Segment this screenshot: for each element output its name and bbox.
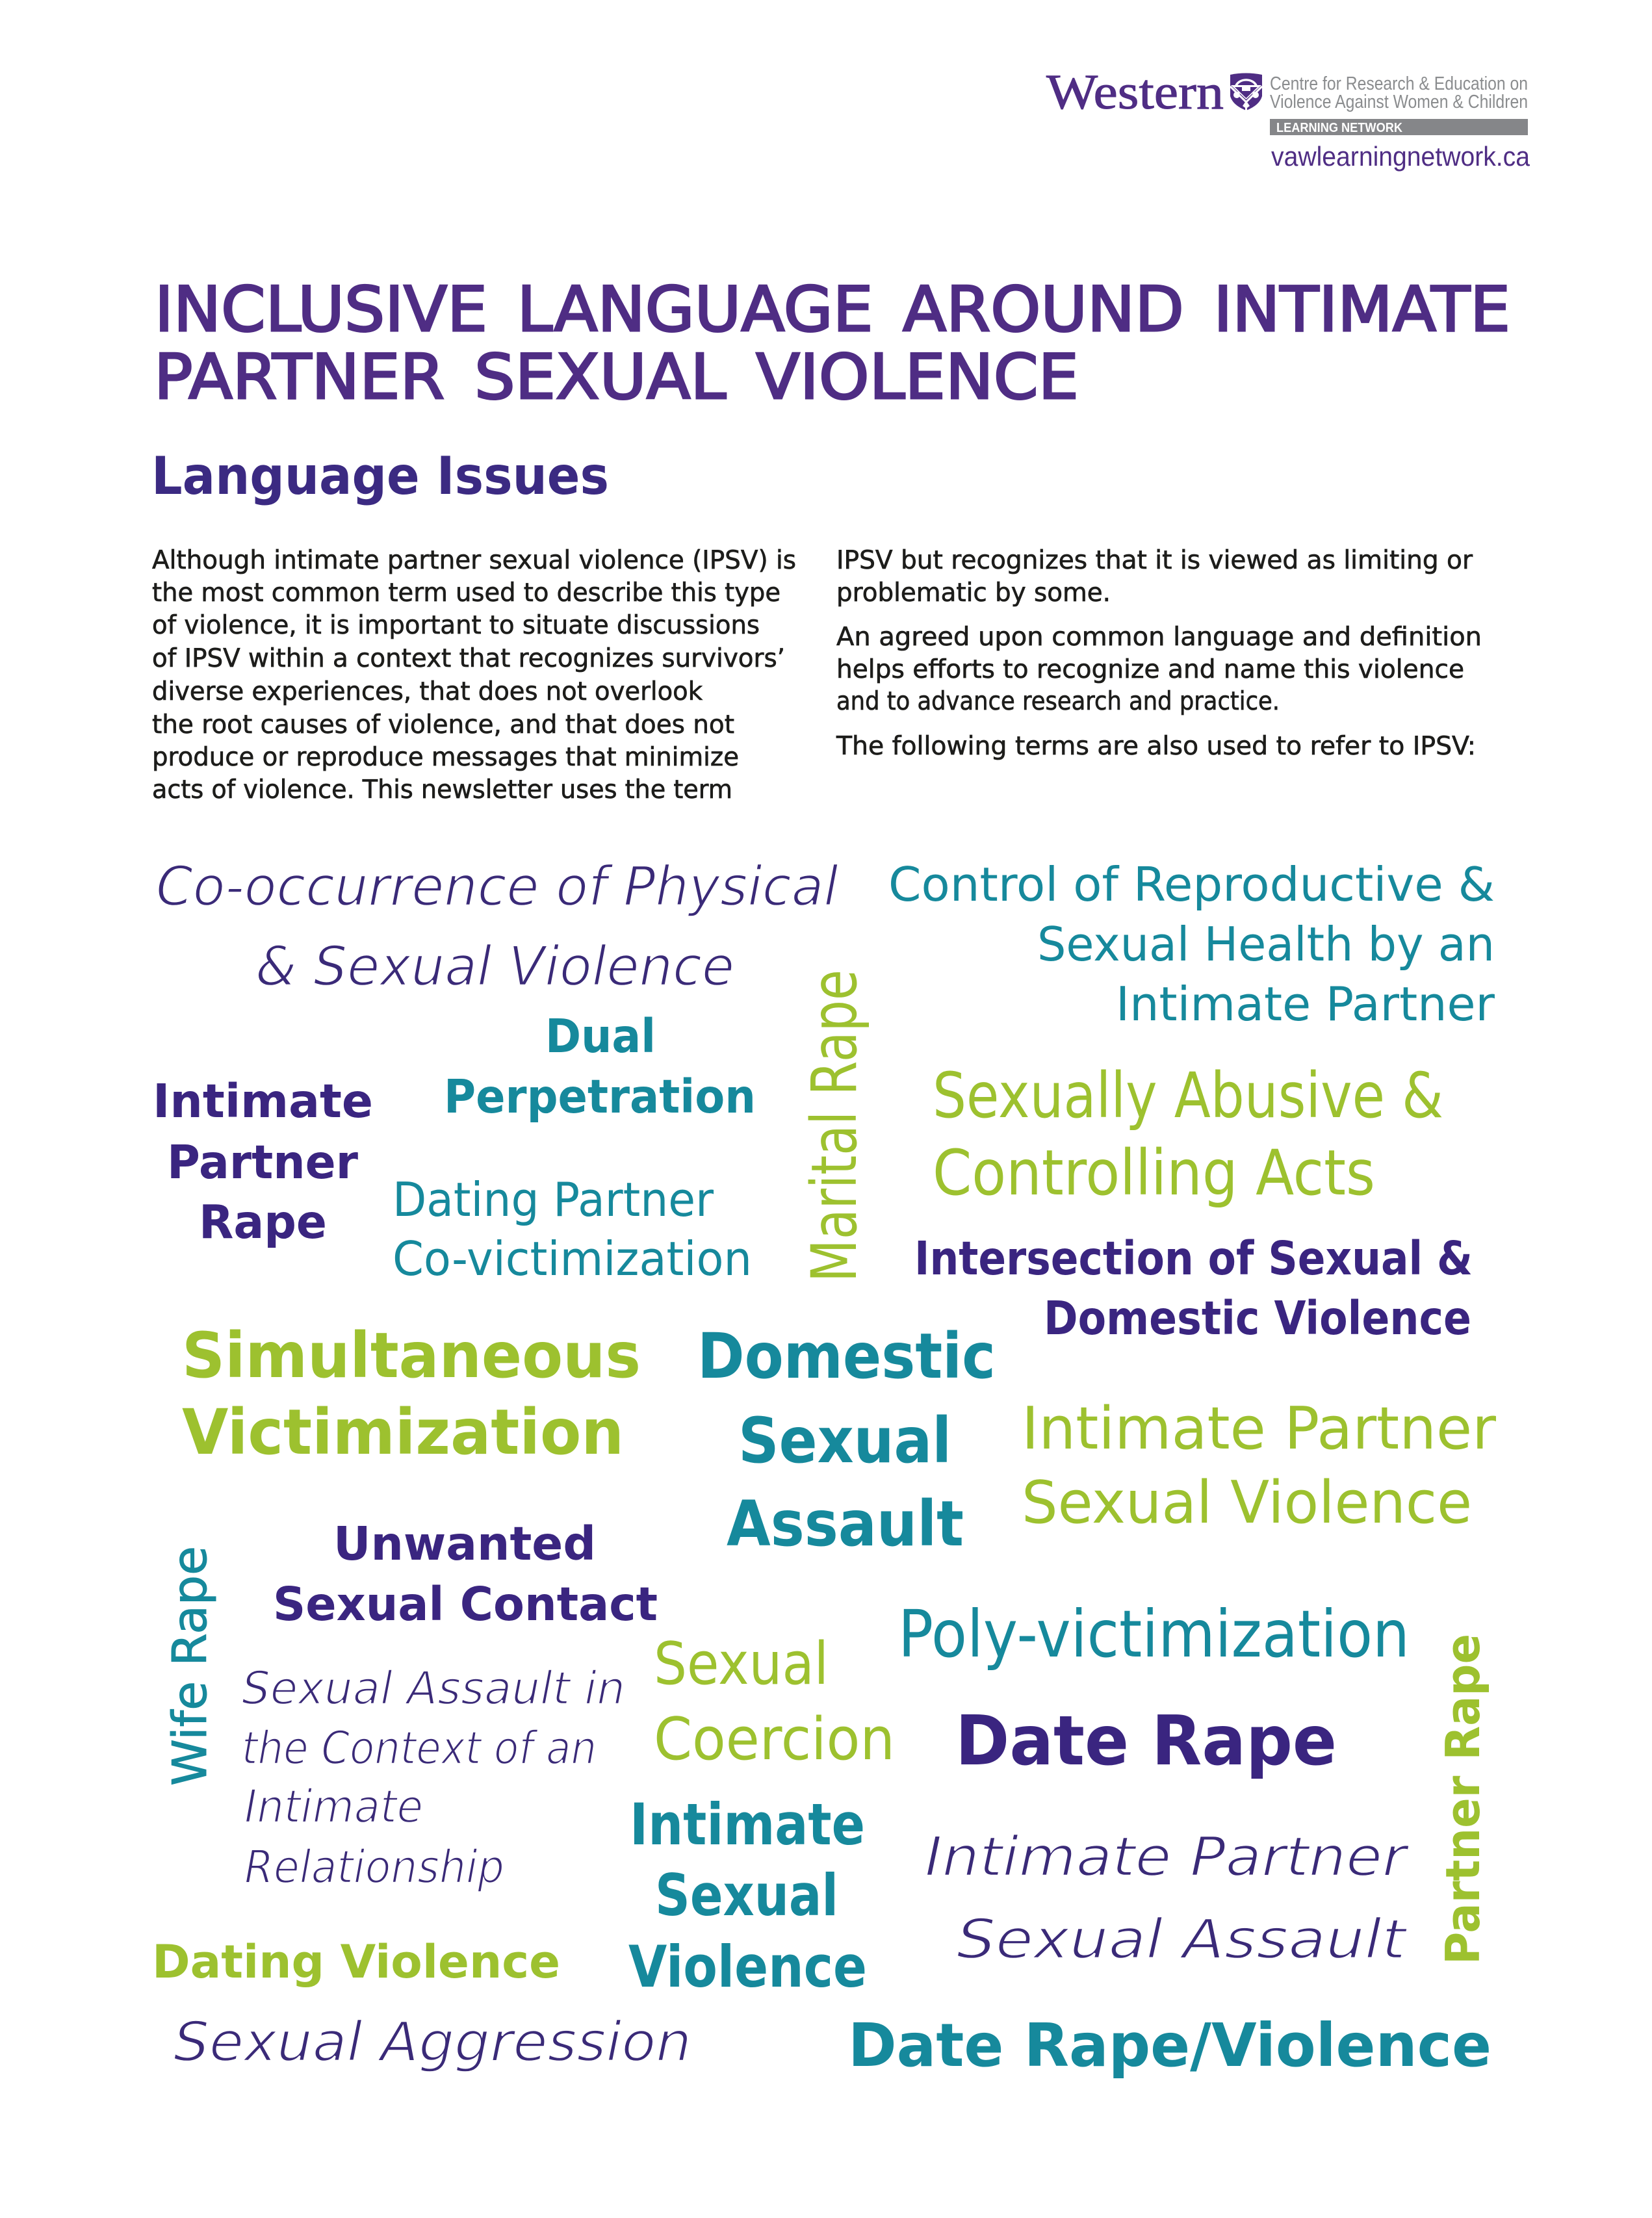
term: Intimate Partner Sexual Violence: Intimate Partner (1022, 1395, 1496, 1463)
title: PARTNER SEXUAL VIOLENCE (154, 342, 1079, 413)
text block: left column: produce or reproduce messages that minimize (152, 743, 739, 772)
term: Control of Reproductive & Sexual Health by an Intimate Partner: Sexual Health by an (1037, 917, 1495, 972)
term: Sexual Coercion: Sexual (654, 1630, 829, 1698)
term: Dual Perpetration (444, 1009, 756, 1124)
term: Intimate Sexual Violence: Sexual (655, 1862, 838, 1929)
text block: right column (836, 546, 1482, 761)
learning network bar: LEARNING NETWORK (1276, 121, 1402, 135)
term: Date Rape: Date Rape (955, 1701, 1337, 1781)
logo centre name: Centre for Research & Education on (1270, 73, 1528, 94)
term: Sexual Aggression: Sexual Aggression (174, 2010, 691, 2074)
learning network bar (1270, 119, 1528, 135)
text block: left column: diverse experiences, that does not overlook (152, 677, 703, 706)
term: Intimate Partner Rape: Partner (167, 1135, 358, 1189)
text block: left column: the most common term used to describe this type (152, 578, 781, 608)
logo wordmark: Western (1046, 65, 1224, 120)
text block: left column: Although intimate partner sexual violence (IPSV) is (152, 546, 796, 575)
term: Sexual Assault in the Context of an Intimate Relationship: Relationship (244, 1840, 504, 1894)
word cloud (152, 855, 1496, 2080)
term: Intimate Partner Sexual Assault (925, 1825, 1410, 1971)
term: Domestic Sexual Assault: Domestic (697, 1320, 996, 1393)
term: Sexual Assault in the Context of an Intimate Relationship (242, 1662, 625, 1894)
term: Co-occurrence of Physical & Sexual Violence (156, 855, 838, 998)
term: Sexual Coercion (654, 1630, 895, 1773)
logo centre name: Violence Against Women & Children (1270, 92, 1528, 112)
term: Intimate Sexual Violence: Violence (628, 1933, 867, 2000)
text block: left column (152, 546, 796, 805)
term: Sexually Abusive & Controlling Acts: Controlling Acts (933, 1137, 1375, 1209)
text block: right column: helps efforts to recognize and name this violence (836, 655, 1464, 684)
text block: right column: problematic by some. (836, 578, 1111, 608)
heading: Language Issues: Language Issues (151, 446, 609, 506)
term: Intimate Partner Sexual Assault: Intimate Partner (925, 1825, 1410, 1889)
text block: right column: IPSV but recognizes that it is viewed as limiting or (836, 546, 1473, 575)
term: Intimate Sexual Violence (628, 1791, 867, 2000)
term: Intimate Sexual Violence: Intimate (630, 1791, 865, 1858)
text block: right column: The following terms are also used to refer to IPSV: (836, 732, 1476, 761)
term: Unwanted Sexual Contact (273, 1517, 658, 1631)
term: Control of Reproductive & Sexual Health by an Intimate Partner: Intimate Partner (1116, 977, 1495, 1031)
term: Intimate Partner Sexual Violence (1022, 1395, 1496, 1537)
term: Intimate Partner Sexual Assault: Sexual Assault (957, 1907, 1408, 1971)
text block: left column: the root causes of violence, and that does not (152, 710, 734, 740)
term: Simultaneous Victimization: Victimization (182, 1396, 624, 1469)
term: Sexual Assault in the Context of an Intimate Relationship: the Context of an (242, 1722, 597, 1775)
text block: left column: of violence, it is important to situate discussions (152, 611, 760, 640)
logo: Western Learning Network (1046, 65, 1530, 172)
term: Control of Reproductive & Sexual Health by an Intimate Partner (888, 857, 1495, 1031)
term: Dual Perpetration: Dual (545, 1009, 656, 1063)
term: Intersection of Sexual & Domestic Violence: Intersection of Sexual & (914, 1232, 1473, 1285)
term: Simultaneous Victimization (182, 1319, 641, 1469)
text block: right column: and to advance research and practice. (836, 687, 1280, 716)
term: Intimate Partner Rape: Rape (199, 1195, 327, 1249)
term: Sexually Abusive & Controlling Acts: Sexually Abusive & (933, 1059, 1443, 1132)
text block: left column: acts of violence. This newsletter uses the term (152, 775, 732, 805)
term: Sexual Coercion: Coercion (654, 1705, 895, 1773)
term: Co-occurrence of Physical & Sexual Violence: & Sexual Violence (255, 935, 734, 998)
term: Co-occurrence of Physical & Sexual Violence: Co-occurrence of Physical (156, 855, 838, 918)
term: Intimate Partner Rape (153, 1074, 373, 1249)
term: Intimate Partner Rape: Intimate (153, 1074, 373, 1128)
term: Wife Rape (vertical): Wife Rape (162, 1546, 217, 1786)
term: Dating Partner Co-victimization: Dating Partner (393, 1172, 714, 1227)
term: Intimate Partner Sexual Violence: Sexual Violence (1022, 1469, 1472, 1537)
term: Marital Rape (vertical): Marital Rape (798, 970, 871, 1282)
term: Sexual Assault in the Context of an Intimate Relationship: Sexual Assault in (242, 1662, 625, 1715)
term: Partner Rape (vertical): Partner Rape (1436, 1634, 1490, 1965)
term: Domestic Sexual Assault: Assault (727, 1488, 964, 1560)
title (154, 274, 1510, 413)
term: Poly-victimization: Poly-victimization (898, 1596, 1410, 1672)
term: Control of Reproductive & Sexual Health by an Intimate Partner: Control of Reproductive & (888, 857, 1495, 912)
term: Domestic Sexual Assault (697, 1320, 996, 1560)
term: Dating Partner Co-victimization: Co-victimization (393, 1232, 752, 1286)
term: Dual Perpetration: Perpetration (444, 1070, 756, 1124)
term: Unwanted Sexual Contact: Sexual Contact (273, 1577, 658, 1631)
term: Domestic Sexual Assault: Sexual (738, 1404, 951, 1477)
term: Sexually Abusive & Controlling Acts (933, 1059, 1443, 1209)
icon: Western shield (1230, 73, 1262, 110)
logo centre name (1270, 73, 1528, 112)
term: Simultaneous Victimization: Simultaneous (182, 1319, 641, 1392)
title: INCLUSIVE LANGUAGE AROUND INTIMATE (155, 274, 1510, 346)
term: Dating Violence: Dating Violence (152, 1935, 560, 1989)
text block: left column: of IPSV within a context that recognizes survivors’ (152, 644, 785, 673)
term: Unwanted Sexual Contact: Unwanted (333, 1517, 596, 1571)
text block: right column: An agreed upon common language and definition (836, 623, 1482, 652)
term: Dating Partner Co-victimization (393, 1172, 752, 1286)
term: Date Rape/Violence: Date Rape/Violence (848, 2011, 1491, 2080)
website URL: vawlearningnetwork.ca (1271, 141, 1530, 172)
term: Intersection of Sexual & Domestic Violence: Domestic Violence (1044, 1291, 1471, 1345)
term: Intersection of Sexual & Domestic Violence (914, 1232, 1473, 1345)
term: Sexual Assault in the Context of an Intimate Relationship: Intimate (244, 1780, 423, 1833)
